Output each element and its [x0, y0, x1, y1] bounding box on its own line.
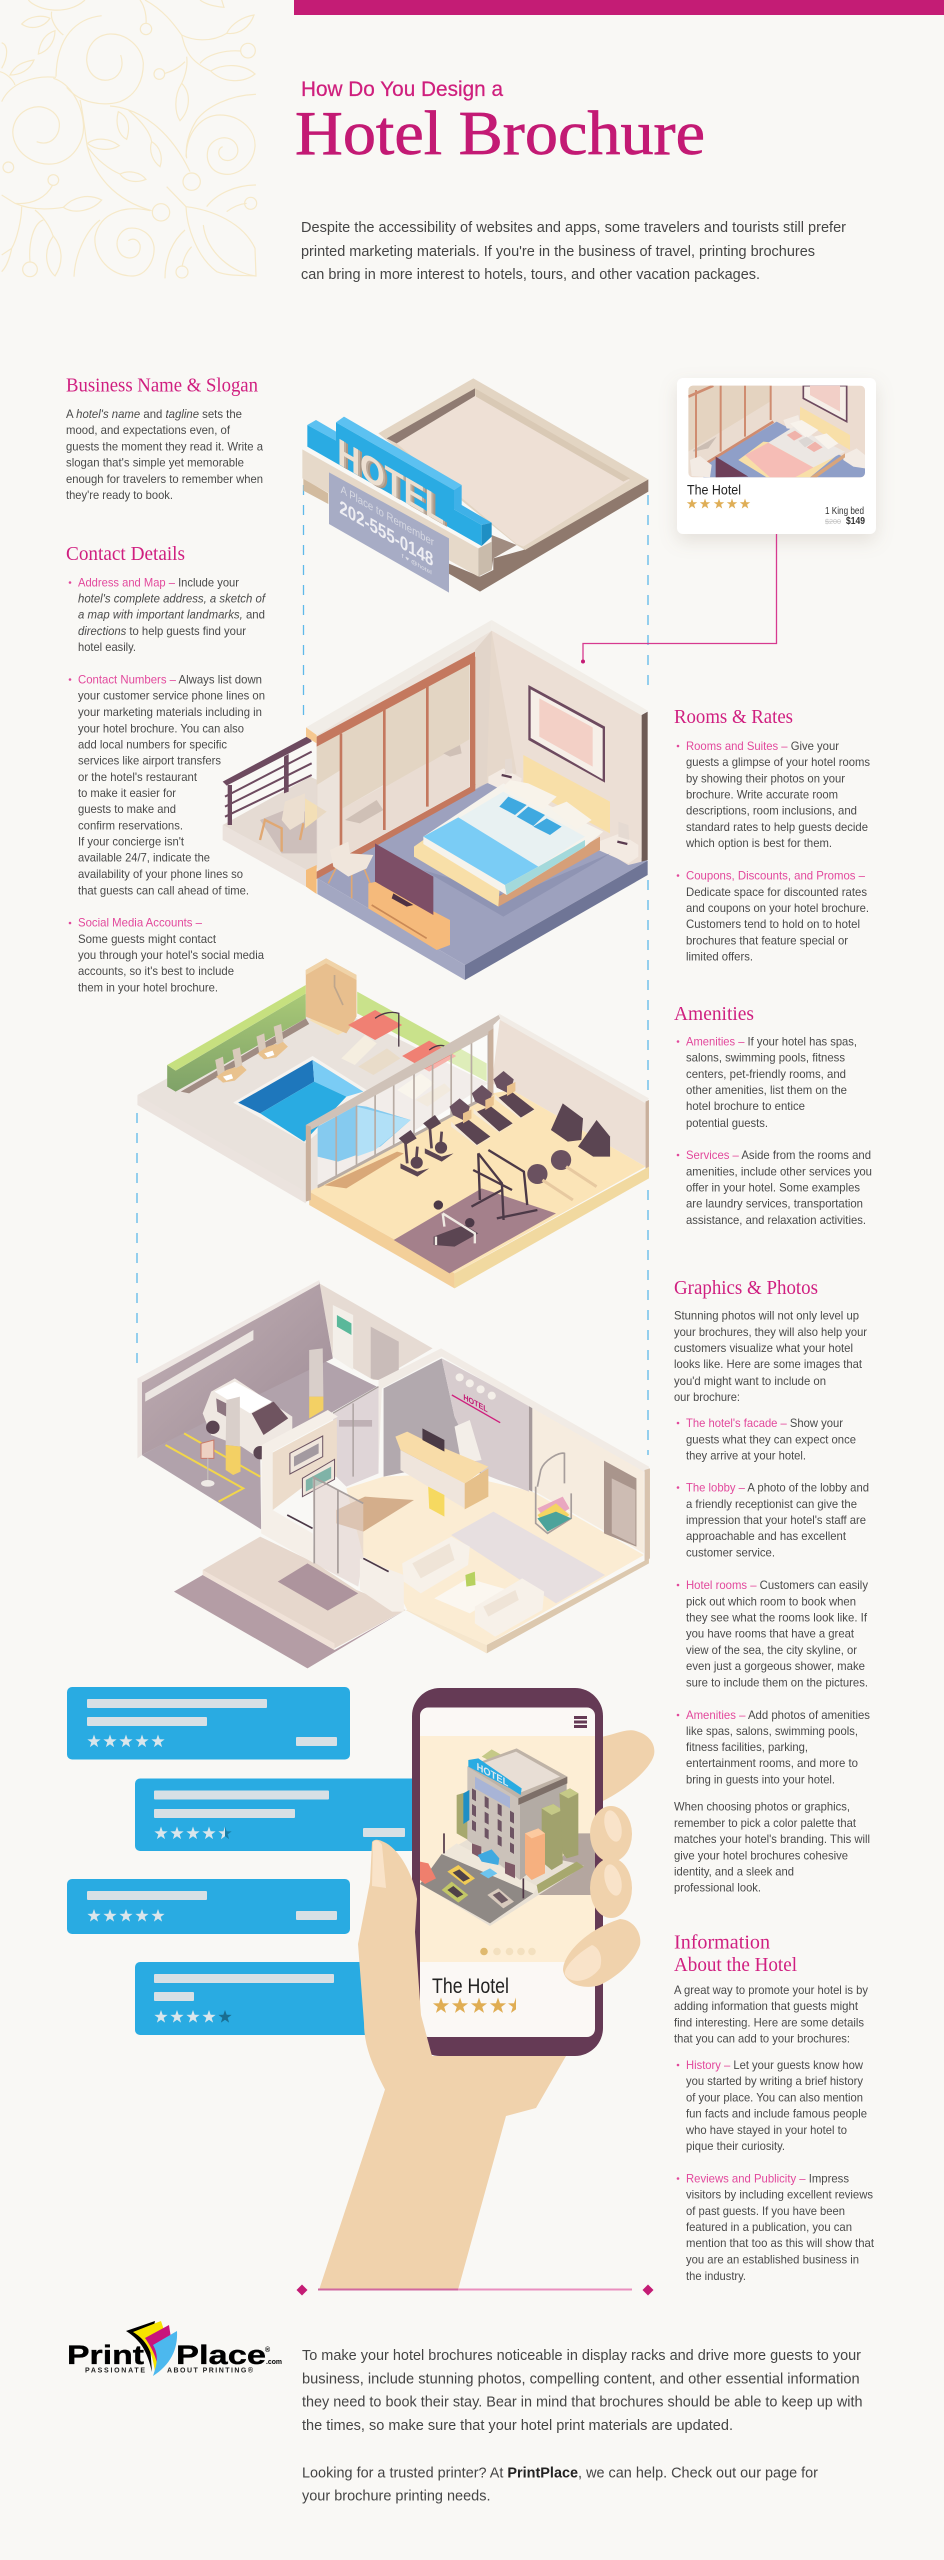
lobby floor [346, 1473, 644, 1645]
heading: Information [674, 1932, 770, 1954]
review card 3 [67, 1879, 350, 1934]
bullet: lobby: a friendly receptionist can give the [686, 1498, 857, 1511]
brochure card [677, 378, 876, 534]
bullet: rooms and suites: descriptions, room inclusions, and [686, 805, 857, 818]
glass doors and blinds [317, 652, 475, 879]
closing text: professional look. [674, 1882, 761, 1895]
bullet: reviews and publicity: featured in a publication, you can [686, 2221, 852, 2234]
luggage cart [536, 1453, 571, 1533]
bullet: address and map: directions to help guests find your [78, 625, 246, 638]
bullet: amenities photos [677, 1709, 870, 1786]
bullet: history: you started by writing a brief history [686, 2075, 863, 2088]
bullet: contact numbers: or the hotel's restaurant [78, 771, 198, 784]
body text [66, 408, 264, 502]
window wall [317, 631, 492, 878]
sofas and coffee table [402, 1537, 544, 1637]
rug [451, 1512, 605, 1603]
floral background pattern [0, 0, 257, 278]
bullet: contact numbers: services like airport transfers [78, 755, 221, 768]
treadmills [449, 1071, 534, 1146]
bullet: contact numbers: available 24/7, indicate the [78, 852, 210, 865]
building [467, 1748, 567, 1880]
intro text: customers visualize what your hotel [674, 1342, 853, 1355]
bullet: amenities: potential guests. [686, 1117, 768, 1130]
bullet: facade: guests what they can expect once [686, 1433, 856, 1446]
lobby walls [378, 1348, 650, 1562]
logo: PrintPlace: .com [266, 2359, 282, 2366]
bullet: address and map: hotel easily. [78, 641, 136, 654]
footer text: the times, so make sure that your hotel print materials are updated. [302, 2418, 733, 2434]
body text: A hotel's name and tagline sets the [66, 408, 242, 421]
panel: graphics and photos [674, 1277, 870, 1895]
rowing machines [527, 1150, 597, 1200]
footer text [302, 2348, 862, 2505]
body text: guests the moment they read it. Write a [66, 440, 264, 454]
bullet: hotel rooms: Hotel rooms – Customers can easily [686, 1579, 868, 1592]
intro text: adding information that guests might [674, 2000, 859, 2013]
hedges [167, 985, 487, 1093]
bullet: contact numbers: your hotel brochure. You can also [78, 722, 244, 735]
bullet: reviews and publicity: visitors by including excellent reviews [686, 2188, 873, 2202]
closing text: give your hotel brochures cohesive [674, 1849, 848, 1862]
panel: information about the hotel [674, 1932, 875, 2283]
smartphone [412, 1688, 603, 2056]
bullet: contact numbers: availability of your phone lines so [78, 868, 243, 881]
parking sign [201, 1440, 215, 1487]
intro paragraph: printed marketing materials. If you're in the business of travel, printing brochures [301, 244, 815, 260]
bullet: coupons: Dedicate space for discounted rates [686, 886, 867, 899]
bullet: lobby: approachable and has excellent [686, 1530, 847, 1543]
closing text: When choosing photos or graphics, [674, 1800, 850, 1813]
gym back wall [492, 1013, 649, 1180]
bullet: history: fun facts and include famous people [686, 2108, 867, 2121]
bullet: coupons: Customers tend to hold on to hotel [686, 918, 860, 931]
cars [420, 1862, 514, 1908]
bullet: social media accounts: you through your hotel's social media [78, 949, 265, 962]
finger one [590, 1806, 632, 1862]
building sign [463, 1758, 522, 1824]
reception desk [395, 1420, 488, 1509]
bullet: amenities photos: bring in guests into your hotel. [686, 1774, 835, 1786]
picture [528, 685, 605, 783]
bullet: services: amenities, include other services you [686, 1165, 872, 1178]
heading: Business Name & Slogan [66, 374, 258, 396]
card price [825, 506, 865, 527]
contact plate: f ♥ @hotel [402, 553, 432, 576]
body text: mood, and expectations even, of [66, 424, 231, 437]
hand back finger [600, 1730, 654, 1801]
bullet: hotel rooms: view of the sea, the city skyline, or [686, 1644, 857, 1657]
intro paragraph: Despite the accessibility of websites and apps, some travelers and tourists still prefer [301, 220, 846, 236]
bullet: amenities photos: like spas, salons, swimming pools, [686, 1725, 858, 1738]
phone stars [433, 1998, 516, 2013]
street lamps [444, 1833, 523, 1898]
bullet: contact numbers: confirm reservations. [78, 819, 183, 832]
logo: PrintPlace: Print [67, 2340, 144, 2370]
trees and block [525, 1788, 578, 1880]
intro text [674, 1984, 868, 2046]
title: How Do You Design a [301, 78, 503, 101]
illustration: hotel roof with sign [302, 378, 648, 593]
bullet: lobby: impression that your hotel's staff are [686, 1514, 866, 1527]
blue sign board [307, 417, 492, 546]
bullet: amenities photos: entertainment rooms, and more to [686, 1757, 858, 1770]
intro text: find interesting. Here are some details [674, 2016, 864, 2030]
closing text [674, 1800, 870, 1895]
baseline with diamonds [296, 2284, 654, 2296]
panel: rooms and rates [674, 706, 870, 964]
bullet: coupons: and coupons on your hotel brochure. [686, 902, 869, 915]
gym floor [309, 1090, 649, 1288]
bullet: contact numbers: your customer service phone lines on [78, 690, 265, 702]
illustration: garage and lobby [137, 1280, 650, 1668]
hotel building illustration [420, 1748, 595, 1926]
bullet: contact numbers: add local numbers for specific [78, 738, 227, 751]
illustration: hotel room [223, 620, 648, 980]
awning [478, 1849, 499, 1865]
bullet: amenities: other amenities, list them on the [686, 1084, 847, 1097]
footer text: To make your hotel brochures noticeable in display racks and drive more guests to your [302, 2348, 861, 2364]
contact plate [329, 472, 449, 593]
bullet: amenities: Amenities – If your hotel has spas, [686, 1036, 857, 1048]
intro text: you'd might want to include on [674, 1375, 826, 1388]
bullet: reviews and publicity: the industry. [686, 2270, 746, 2283]
entry walls and glass [261, 1387, 404, 1612]
bullet: lobby: The lobby – A photo of the lobby and [686, 1482, 869, 1494]
intro text [674, 1310, 867, 1404]
bullet: services: Services – Aside from the rooms and [686, 1149, 871, 1162]
bullet: facade: they arrive at your hotel. [686, 1449, 806, 1462]
bullet: hotel rooms: sure to include them on the pictures. [686, 1676, 868, 1690]
footer text: Looking for a trusted printer? At PrintPlace, we can help. Check out our page for [302, 2465, 818, 2481]
illustration: pool and gym [137, 958, 649, 1288]
logo icon [126, 2321, 177, 2376]
bullet: contact numbers: to make it easier for [78, 787, 176, 800]
bullet: facade [677, 1417, 856, 1462]
bullet: reviews and publicity: mention that too as this will show that [686, 2237, 875, 2250]
body text: slogan that's simple yet memorable [66, 456, 244, 470]
intro text: that you can add to your brochures: [674, 2033, 850, 2046]
bullet: history: History – Let your guests know how [686, 2059, 864, 2072]
suitcase [428, 1487, 444, 1517]
bullet: lobby [677, 1482, 869, 1560]
bullet: contact numbers: If your concierge isn't [78, 836, 185, 848]
bullet: amenities: salons, swimming pools, fitness [686, 1052, 845, 1065]
bullet: rooms and suites: which option is best for them. [685, 837, 832, 850]
intro text: Stunning photos will not only level up [674, 1310, 859, 1323]
bullet: history: who have stayed in your hotel to [685, 2124, 847, 2137]
bullet: facade: The hotel's facade – Show your [686, 1417, 843, 1430]
bullet: social media accounts: them in your hotel brochure. [78, 981, 218, 994]
wall clocks and sign [452, 1373, 500, 1423]
closing text: identity, and a sleek and [674, 1866, 794, 1878]
bullet: hotel rooms: even just a gorgeous shower, make [686, 1660, 865, 1673]
bullet: rooms and suites [677, 740, 870, 850]
bullet: coupons: brochures that feature special or [686, 934, 848, 948]
contact plate: A Place to Remember [341, 482, 434, 549]
heading: Contact Details [66, 543, 185, 565]
bullet: social media accounts [69, 917, 265, 994]
garage [137, 1280, 433, 1529]
heading: Rooms & Rates [674, 706, 793, 728]
bullet: history: pique their curiosity. [686, 2140, 785, 2153]
intro text: looks like. Here are some images that [674, 1358, 863, 1371]
card price: 1 King bed [825, 506, 864, 517]
bullet: rooms and suites: standard rates to help guests decide [686, 821, 868, 834]
bullet: hotel rooms: they see what the rooms look like. If [686, 1611, 868, 1624]
bullet: contact numbers: your marketing materials including in [78, 706, 262, 719]
intro text: your brochures, they will also help your [674, 1326, 867, 1339]
bullet: address and map: a map with important landmarks, and [78, 609, 265, 622]
columns [226, 1348, 323, 1475]
bullet: reviews and publicity: Reviews and Publicity – Impress [686, 2172, 849, 2185]
bullet: social media accounts: Social Media Accounts – [78, 917, 203, 930]
bullet: hotel rooms: you have rooms that have a great [686, 1628, 855, 1640]
bullet: amenities: hotel brochure to entice [686, 1100, 805, 1113]
bullet: rooms and suites: guests a glimpse of your hotel rooms [686, 756, 870, 769]
footer text: they need to book their stay. Bear in mind that brochures should be able to keep up with [302, 2395, 862, 2411]
bullet: contact numbers: guests to make and [78, 803, 176, 816]
menu icon [574, 1716, 587, 1728]
bullet: amenities photos: fitness facilities, parking, [686, 1741, 808, 1754]
review card 4 [135, 1962, 375, 2035]
building sign: HOTEL [477, 1761, 509, 1790]
lounge chairs [215, 1024, 288, 1083]
intro text: A great way to promote your hotel is by [674, 1984, 868, 1997]
balcony [223, 735, 327, 887]
top magenta bar [294, 0, 944, 15]
squat rack [471, 1150, 537, 1220]
bullet: services: assistance, and relaxation activities. [686, 1214, 866, 1227]
logo: PrintPlace: PASSIONATE [85, 2368, 145, 2374]
bullet: lobby: customer service. [686, 1547, 775, 1560]
panel: amenities [674, 1003, 872, 1227]
stair machines [551, 1103, 610, 1157]
bullet: services: are laundry services, transportation [686, 1198, 863, 1211]
pool [233, 1056, 367, 1143]
bullet: hotel rooms [677, 1579, 868, 1690]
bullet: history [677, 2059, 867, 2153]
bullet: rooms and suites: brochure. Write accurate room [686, 789, 838, 802]
bullet: rooms and suites: by showing their photos on your [686, 772, 845, 785]
heading: Graphics & Photos [674, 1277, 818, 1299]
bullet: reviews and publicity: you are an established business in [686, 2254, 859, 2266]
bullet: services [677, 1149, 872, 1227]
bullet: contact numbers: that guests can call ahead of time. [78, 884, 249, 897]
weight bench [434, 1200, 478, 1247]
thumb nail [372, 1841, 386, 1888]
card text: The Hotel [687, 482, 741, 498]
card price: $200 [825, 517, 841, 526]
intro paragraph [301, 220, 846, 283]
bullet: amenities [677, 1036, 857, 1130]
carousel dots [480, 1948, 536, 1955]
palm and arm [319, 1840, 566, 2290]
bullet: rooms and suites: Rooms and Suites – Give your [686, 740, 839, 753]
bullet: amenities photos: Amenities – Add photos of amenities [686, 1709, 870, 1722]
bullet: address and map: hotel's complete address, a sketch of [78, 592, 267, 605]
bullet: coupons: limited offers. [686, 951, 753, 964]
street and entry platform [174, 1537, 406, 1668]
heading: About the Hotel [674, 1954, 797, 1976]
bullet: reviews and publicity: of past guests. If you have been [686, 2205, 845, 2218]
bullet: social media accounts: Some guests might contact [78, 933, 217, 946]
panel: contact details [66, 543, 267, 994]
title: Hotel Brochure [295, 100, 705, 168]
closing text: matches your hotel's branding. This will [674, 1833, 870, 1846]
bullet: social media accounts: accounts, so it's best to include [78, 965, 234, 978]
connector arrow from card to room [581, 534, 776, 664]
body text: enough for travelers to remember when [66, 473, 263, 486]
bed [414, 755, 610, 917]
finger three [563, 1919, 640, 1987]
heading [674, 1932, 797, 1976]
tv and cabinet [368, 843, 450, 950]
bullet: address and map [69, 576, 267, 654]
wall clocks and sign: HOTEL [463, 1392, 488, 1414]
shadow on floor [336, 1497, 414, 1532]
pool deck [137, 997, 488, 1203]
bullet: hotel rooms: pick out which room to book when [686, 1595, 856, 1608]
bullet: services: offer in your hotel. Some examples [686, 1182, 860, 1194]
shower [306, 958, 360, 1035]
nightstands [488, 758, 638, 863]
hotel letters: HOTEL [339, 431, 446, 534]
footer text: your brochure printing needs. [302, 2489, 490, 2505]
card photo [688, 386, 865, 477]
closing text: remember to pick a color palette that [674, 1817, 857, 1830]
armchair [328, 842, 373, 898]
logo: PrintPlace: ABOUT PRINTING® [167, 2366, 254, 2374]
intro text: our brochure: [674, 1391, 740, 1404]
hotel letters: HOTEL [341, 433, 448, 536]
window wall [306, 1015, 500, 1202]
contact plate: 202-555-0148 [339, 497, 433, 571]
body text: they're ready to book. [66, 489, 173, 502]
hotel letters: HOTEL [337, 430, 444, 533]
phone hotel title: The Hotel [432, 1975, 509, 1998]
footer text: business, include stunning photos, compelling content, and other essential information [302, 2371, 860, 2387]
logo: PrintPlace: ® [265, 2346, 271, 2354]
hand holding phone [319, 1806, 640, 2290]
card price: $149 [846, 516, 865, 527]
heading: Amenities [674, 1003, 754, 1025]
logo: PrintPlace [67, 2321, 282, 2376]
bullet: coupons: Coupons, Discounts, and Promos – [686, 869, 866, 882]
bullet: coupons [677, 869, 869, 964]
finger two [590, 1858, 632, 1918]
car [203, 1378, 292, 1460]
bullet: reviews and publicity [677, 2172, 875, 2283]
bullet: history: of your place. You can also mention [686, 2092, 863, 2104]
review card 1 [67, 1687, 350, 1760]
review card 2 [135, 1778, 420, 1851]
card stars [687, 498, 750, 508]
intro paragraph: can bring in more interest to hotels, tours, and other vacation packages. [301, 267, 760, 283]
bullet: contact numbers: Contact Numbers – Always list down [78, 673, 262, 686]
bullet: amenities: centers, pet-friendly rooms, and [686, 1068, 846, 1081]
exercise bikes [399, 1115, 454, 1177]
bullet: contact numbers [69, 673, 265, 897]
dashed guide lines [137, 485, 648, 1455]
elevator [604, 1461, 636, 1547]
panel: business name and slogan [66, 374, 264, 502]
back right wall [487, 630, 642, 865]
umbrellas and loungers [341, 1010, 456, 1107]
bullet: address and map: Address and Map – Include your [78, 576, 239, 589]
logo: PrintPlace: Place [176, 2340, 266, 2370]
